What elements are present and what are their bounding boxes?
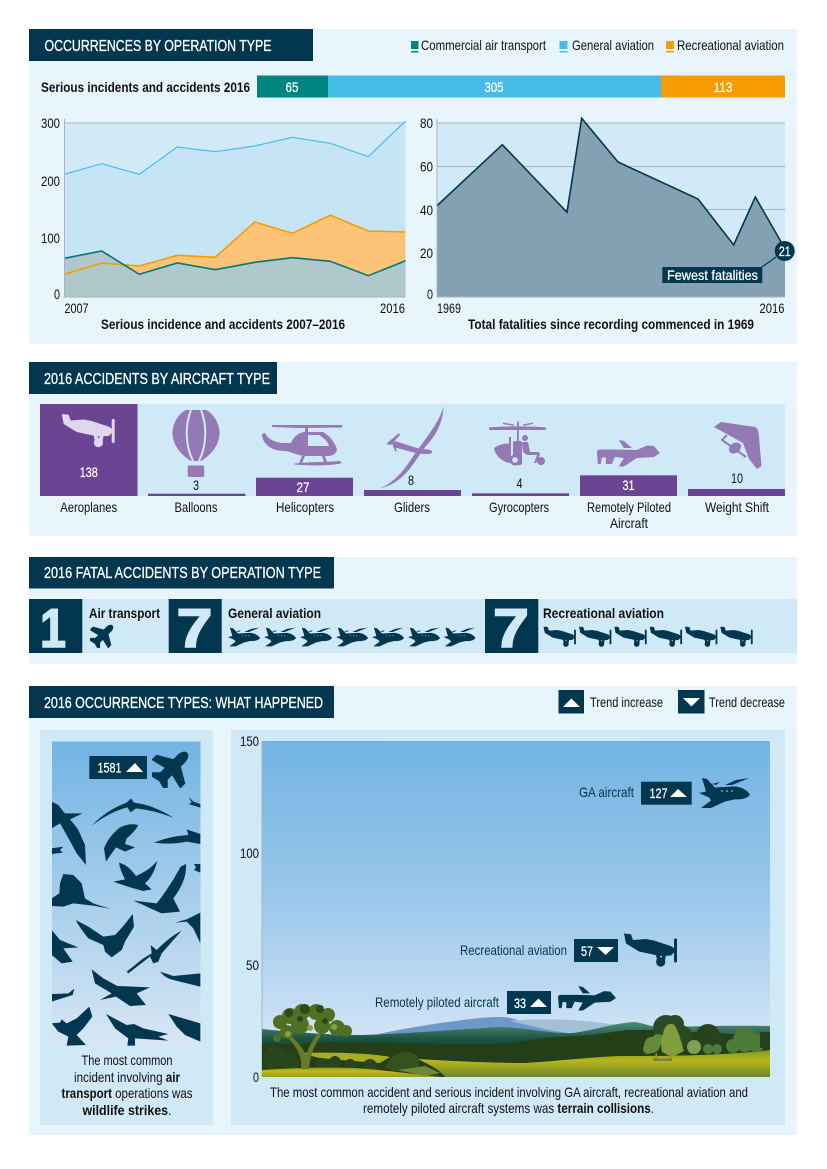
axis labels: 100 — [240, 845, 259, 861]
stacked bar: serious incidents and accidents 2016 — [41, 76, 785, 98]
panel: 2016 occurrence types — [29, 686, 797, 1135]
column: helicopters 27: 27 — [296, 479, 310, 495]
caption: terrain collisions — [270, 1084, 748, 1116]
heading: 2016 accidents by aircraft type: 2016 ACCIDENTS BY AIRCRAFT TYPE — [44, 371, 270, 388]
area chart: serious incidence and accidents 2007-2016: 100 — [41, 230, 60, 246]
heading: 2016 accidents by aircraft type — [29, 362, 277, 394]
column: helicopters 27 — [256, 425, 353, 515]
stacked bar: serious incidents and accidents 2016: 113 — [714, 79, 733, 95]
heading: occurrences by operation type: OCCURRENCES BY OPERATION TYPE — [44, 38, 272, 55]
area chart: serious incidence and accidents 2007-2016: 300 — [41, 115, 60, 131]
column: weight shift 10 — [688, 422, 785, 515]
caption: wildlife strikes: transport operations was — [62, 1085, 192, 1101]
callout: fewest fatalities 21: 21 — [779, 243, 791, 259]
column: aeroplanes 138: 138 — [80, 464, 98, 480]
area chart: total fatalities since 1969: 2016 — [760, 300, 785, 316]
area chart: total fatalities since 1969: 1969 — [437, 300, 461, 316]
panel: 2016 accidents by aircraft type — [29, 362, 797, 536]
caption: wildlife strikes — [62, 1052, 192, 1118]
axis labels: 0 — [253, 1069, 259, 1085]
stacked bar: serious incidents and accidents 2016: 65 — [286, 79, 299, 95]
legend: Commercial air transport — [421, 37, 546, 53]
callout: fewest fatalities 21 — [662, 241, 795, 283]
heading: 2016 occurrence types what happened — [29, 686, 334, 718]
panel: terrain collisions — [231, 730, 785, 1125]
area chart: total fatalities since 1969: 0 — [427, 286, 433, 302]
callout: GA aircraft 127: 127 — [650, 785, 668, 801]
stat: air transport 1 — [29, 597, 160, 659]
column: gliders 8 — [364, 407, 461, 515]
caption: wildlife strikes: wildlife strikes. — [82, 1102, 172, 1118]
column: remotely piloted aircraft 31: Aircraft — [610, 515, 648, 531]
heading: 2016 occurrence types what happened: 2016 OCCURRENCE TYPES: WHAT HAPPENED — [44, 695, 323, 712]
stacked bar: serious incidents and accidents 2016: Serious incidents and accidents 2016 — [41, 79, 250, 95]
stat: air transport 1: Air transport — [89, 605, 160, 621]
landscape illustration — [262, 1004, 770, 1077]
legend: trend: Trend increase — [590, 694, 663, 710]
panel: 2016 fatal accidents by operation type — [29, 557, 797, 664]
stacked bar: serious incidents and accidents 2016: 305 — [484, 79, 504, 95]
stat: general aviation 7: General aviation — [228, 605, 321, 621]
stat: recreational aviation 7: Recreational aviation — [543, 605, 664, 621]
birds illustration — [52, 797, 200, 1046]
badge: 1581 trend increase: 1581 — [98, 760, 122, 776]
area chart: serious incidence and accidents 2007-2016 — [41, 115, 406, 332]
area chart: total fatalities since 1969: 40 — [420, 202, 433, 218]
icon: air transport plane — [143, 738, 202, 797]
callout: remotely piloted aircraft 33: Remotely piloted aircraft — [375, 994, 499, 1010]
column: gliders 8: Gliders — [394, 499, 430, 515]
caption: terrain collisions: remotely piloted aircraft systems was terrain collisions. — [363, 1100, 654, 1116]
column: gyrocopters 4 — [472, 422, 569, 515]
column: gyrocopters 4: 4 — [516, 475, 523, 491]
area chart: serious incidence and accidents 2007-2016: 2007 — [64, 300, 89, 316]
column: gliders 8: 8 — [408, 472, 414, 488]
left tree — [288, 1034, 321, 1069]
badge: 1581 trend increase — [89, 756, 147, 779]
callout: recreational aviation 57 — [460, 934, 677, 967]
stat: general aviation 7 — [169, 597, 475, 659]
panel: occurrences by operation type — [29, 29, 797, 344]
column: balloons 3 — [148, 410, 246, 515]
axis labels — [240, 733, 259, 1085]
caption: wildlife strikes: The most common — [82, 1052, 172, 1068]
column: balloons 3: 3 — [193, 477, 199, 493]
legend: trend — [558, 690, 785, 714]
callout: recreational aviation 57: 57 — [581, 943, 593, 959]
column: aeroplanes 138 — [40, 404, 138, 515]
callout: fewest fatalities 21: Fewest fatalities — [667, 267, 758, 283]
column: balloons 3: Balloons — [174, 499, 218, 515]
stat: recreational aviation 7 — [485, 597, 753, 659]
area chart: total fatalities since 1969: 60 — [420, 158, 433, 174]
column: gyrocopters 4: Gyrocopters — [489, 499, 549, 515]
area chart: serious incidence and accidents 2007-2016: 2016 — [380, 300, 405, 316]
column: remotely piloted aircraft 31: Remotely Piloted — [587, 499, 671, 515]
column: remotely piloted aircraft 31: 31 — [622, 477, 635, 493]
axis labels: 50 — [246, 957, 259, 973]
axis labels: 150 — [240, 733, 259, 749]
callout: remotely piloted aircraft 33 — [375, 986, 616, 1014]
area chart: total fatalities since 1969: 20 — [420, 245, 433, 261]
column: helicopters 27: Helicopters — [276, 499, 334, 515]
area chart: total fatalities since 1969 — [420, 115, 795, 332]
area chart: total fatalities since 1969: Total fatalities since recording commenced in 1969 — [468, 316, 754, 332]
column: weight shift 10: Weight Shift — [705, 499, 769, 515]
column: weight shift 10: 10 — [731, 470, 743, 486]
heading: 2016 fatal accidents by operation type: 2016 FATAL ACCIDENTS BY OPERATION TYPE — [44, 565, 321, 582]
callout: remotely piloted aircraft 33: 33 — [514, 995, 526, 1011]
callout: recreational aviation 57: Recreational aviation — [460, 942, 567, 958]
area chart: serious incidence and accidents 2007-2016: Serious incidence and accidents 2007–2016 — [101, 316, 345, 332]
legend: General aviation — [572, 37, 654, 53]
callout: GA aircraft 127 — [579, 778, 750, 808]
legend — [411, 37, 784, 53]
area chart: total fatalities since 1969: 80 — [420, 115, 433, 131]
right trees — [653, 1015, 692, 1047]
caption: wildlife strikes: incident involving air — [74, 1069, 180, 1085]
callout: GA aircraft 127: GA aircraft — [579, 784, 634, 800]
heading: 2016 fatal accidents by operation type — [29, 557, 334, 588]
area chart: serious incidence and accidents 2007-2016: 0 — [54, 286, 60, 302]
panel: wildlife strikes — [40, 730, 213, 1125]
legend: trend: Trend decrease — [709, 694, 785, 710]
legend: Recreational aviation — [677, 37, 784, 53]
column: aeroplanes 138: Aeroplanes — [60, 499, 117, 515]
area chart: serious incidence and accidents 2007-2016: 200 — [41, 173, 60, 189]
stat: air transport 1: 1 — [40, 597, 66, 659]
column: remotely piloted aircraft 31 — [580, 440, 677, 531]
stat: recreational aviation 7: 7 — [493, 597, 529, 659]
stat: general aviation 7: 7 — [176, 597, 212, 659]
heading: occurrences by operation type — [29, 29, 313, 61]
